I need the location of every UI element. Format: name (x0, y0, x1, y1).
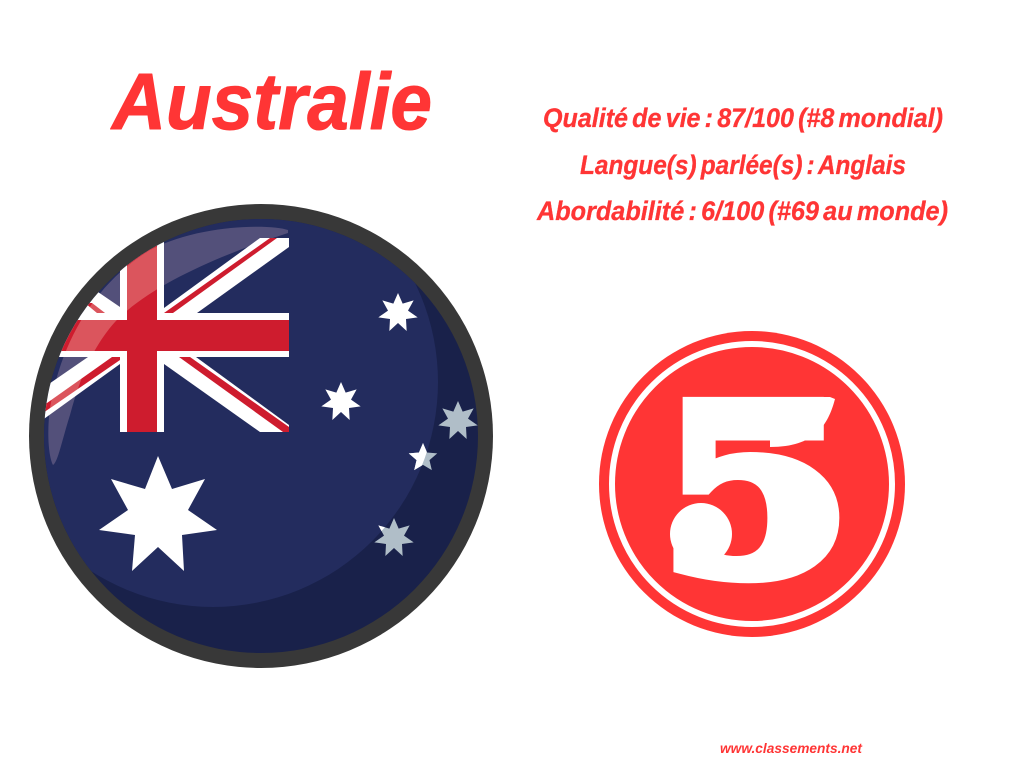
number accents (670, 397, 835, 565)
badge ring (29, 204, 493, 668)
flag disc (44, 219, 478, 653)
footer website: www.classements.net (720, 740, 863, 756)
title: Australie (110, 57, 432, 146)
icon: rank badge number 5 (599, 331, 905, 637)
text block: key facts (536, 103, 948, 226)
red disc (599, 331, 905, 637)
gloss highlight (48, 227, 288, 465)
union jack (44, 238, 289, 432)
icon: Australian flag badge (29, 204, 493, 668)
Southern Cross stars (374, 401, 478, 556)
languages: Langue(s) parlée(s) : Anglais (580, 150, 906, 180)
rank number: 5 (659, 356, 852, 628)
federation star (99, 456, 217, 571)
quality of life: Qualité de vie : 87/100 (#8 mondial) (543, 103, 943, 133)
affordability: Abordabilité : 6/100 (#69 au monde) (536, 196, 948, 226)
white ring (612, 344, 892, 624)
